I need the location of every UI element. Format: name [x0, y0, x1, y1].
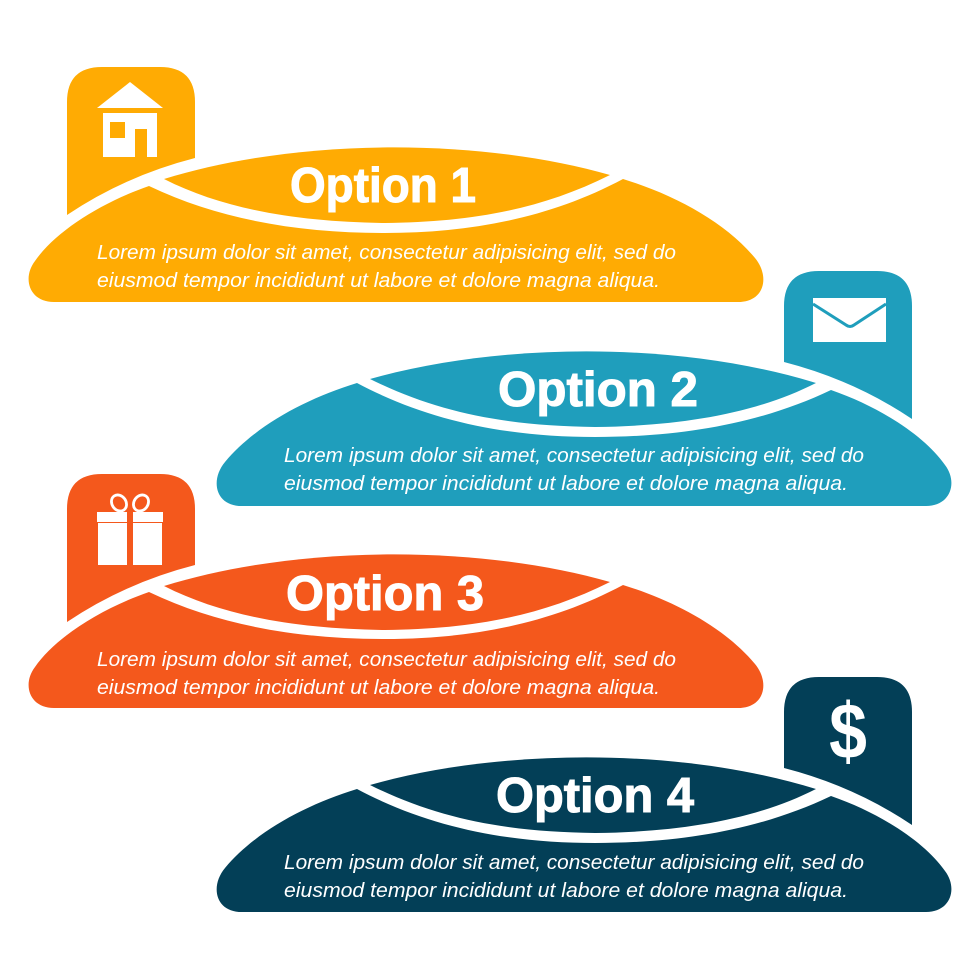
heading: Option 2: [498, 363, 698, 417]
text block: [284, 445, 864, 495]
lens heading shape: [370, 757, 816, 833]
body shape: [217, 383, 951, 506]
panel: option 3: [29, 474, 763, 708]
text block: Lorem ipsum dolor sit amet, consectetur adipisicing elit, sed do: [97, 242, 676, 264]
heading: Option 3: [286, 567, 484, 621]
lens heading shape: [164, 554, 610, 630]
icon: dollar: $: [829, 686, 867, 775]
panel: option 2: [217, 271, 951, 506]
text block: Lorem ipsum dolor sit amet, consectetur adipisicing elit, sed do: [284, 852, 864, 874]
text block: eiusmod tempor incididunt ut labore et dolore magna aliqua.: [97, 677, 660, 699]
icon: gift: [97, 492, 163, 565]
text block: [284, 852, 864, 902]
body shape: [29, 179, 763, 302]
text block: Lorem ipsum dolor sit amet, consectetur adipisicing elit, sed do: [97, 649, 676, 671]
body shape: [217, 789, 951, 912]
lens heading shape: [164, 147, 610, 223]
text block: eiusmod tempor incididunt ut labore et dolore magna aliqua.: [284, 473, 848, 495]
text block: [97, 649, 676, 699]
tab with gift icon: [67, 474, 195, 622]
text block: [97, 242, 676, 292]
heading: Option 4: [496, 769, 694, 823]
panel: option 1: [29, 67, 763, 302]
tab with envelope icon: [784, 271, 912, 419]
icon: house: [97, 82, 163, 157]
lens heading shape: [370, 351, 816, 427]
text block: eiusmod tempor incididunt ut labore et dolore magna aliqua.: [97, 270, 660, 292]
text block: eiusmod tempor incididunt ut labore et dolore magna aliqua.: [284, 880, 848, 902]
tab with house icon: [67, 67, 195, 215]
tab with dollar icon: [784, 677, 912, 825]
heading: Option 1: [290, 159, 476, 213]
icon: envelope: [813, 298, 886, 342]
text block: Lorem ipsum dolor sit amet, consectetur adipisicing elit, sed do: [284, 445, 864, 467]
panel: option 4: [217, 677, 951, 912]
body shape: [29, 585, 763, 708]
